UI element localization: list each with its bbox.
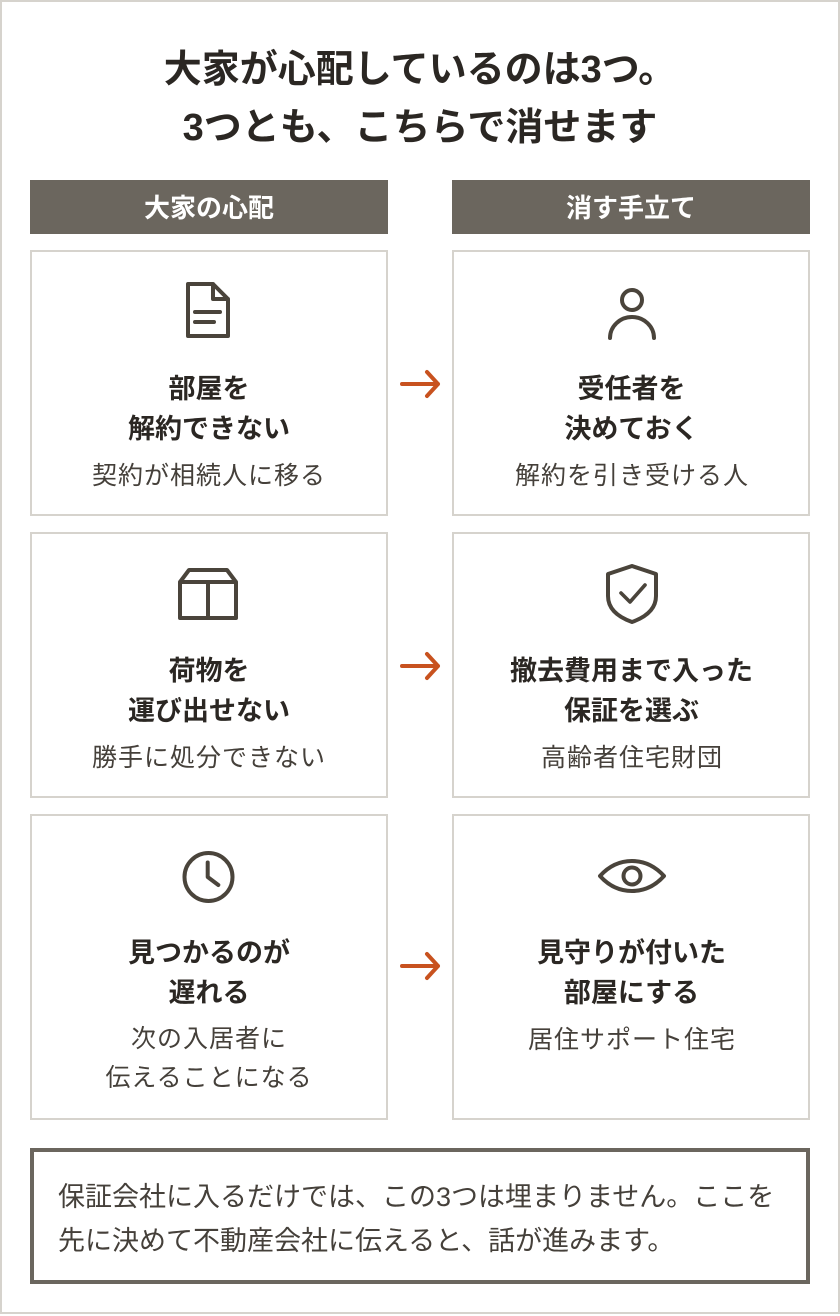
- worry 3 heading: 見つかるのが: [128, 938, 290, 968]
- worry 3 description: 伝えることになる: [105, 1064, 313, 1092]
- worry 2 description: 勝手に処分できない: [92, 744, 326, 772]
- measure 2 heading: [510, 656, 753, 726]
- icon: shield: [606, 564, 658, 624]
- column header: measures: [452, 180, 810, 234]
- icon: document: [186, 282, 230, 338]
- worry 1 heading: 部屋を: [168, 374, 250, 404]
- panel: worry 1: [30, 250, 388, 516]
- measure 1 heading: 決めておく: [564, 414, 699, 444]
- arrow 1: [400, 370, 440, 398]
- panel: measure 3: [452, 814, 810, 1120]
- icon: person: [608, 288, 656, 340]
- icon: eye: [598, 859, 666, 893]
- column header: worries: 大家の心配: [144, 193, 274, 223]
- arrow 3: [400, 952, 440, 980]
- worry 1 description: 契約が相続人に移る: [92, 462, 326, 490]
- measure 1 heading: [564, 374, 699, 444]
- measure 3 description: 居住サポート住宅: [528, 1026, 736, 1054]
- measure 3 heading: 部屋にする: [564, 978, 699, 1008]
- measure 2 heading: 撤去費用まで入った: [510, 656, 753, 686]
- panel: measure 2: [452, 532, 810, 798]
- title: [164, 48, 676, 149]
- worry 2 heading: 運び出せない: [128, 696, 290, 726]
- measure 2 description: 高齢者住宅財団: [541, 744, 723, 772]
- worry 1 heading: 解約できない: [128, 414, 290, 444]
- title: 3つとも、こちらで消せます: [183, 107, 657, 149]
- worry 3 heading: 遅れる: [168, 978, 250, 1008]
- callout note: 先に決めて不動産会社に伝えると、話が進みます。: [58, 1226, 674, 1256]
- arrow 2: [400, 652, 440, 680]
- worry 3 description: [105, 1025, 313, 1092]
- callout note: [30, 1148, 810, 1284]
- measure 3 heading: [537, 938, 726, 1008]
- measure 1 heading: 受任者を: [578, 374, 686, 404]
- icon: box: [178, 568, 238, 620]
- panel: measure 1: [452, 250, 810, 516]
- icon: clock: [182, 851, 234, 903]
- worry 2 heading: [128, 656, 290, 726]
- worry 3 heading: [128, 938, 290, 1008]
- callout note: 保証会社に入るだけでは、この3つは埋まりません。ここを: [58, 1182, 774, 1212]
- worry 3 description: 次の入居者に: [131, 1025, 287, 1053]
- title: 大家が心配しているのは3つ。: [164, 49, 676, 91]
- worry 1 heading: [128, 374, 290, 444]
- panel: worry 3: [30, 814, 388, 1120]
- measure 3 heading: 見守りが付いた: [537, 938, 726, 968]
- measure 1 description: 解約を引き受ける人: [515, 462, 749, 490]
- column header: measures: 消す手立て: [566, 193, 696, 223]
- column header: worries: [30, 180, 388, 234]
- panel: worry 2: [30, 532, 388, 798]
- worry 2 heading: 荷物を: [168, 656, 250, 686]
- measure 2 heading: 保証を選ぶ: [564, 696, 699, 726]
